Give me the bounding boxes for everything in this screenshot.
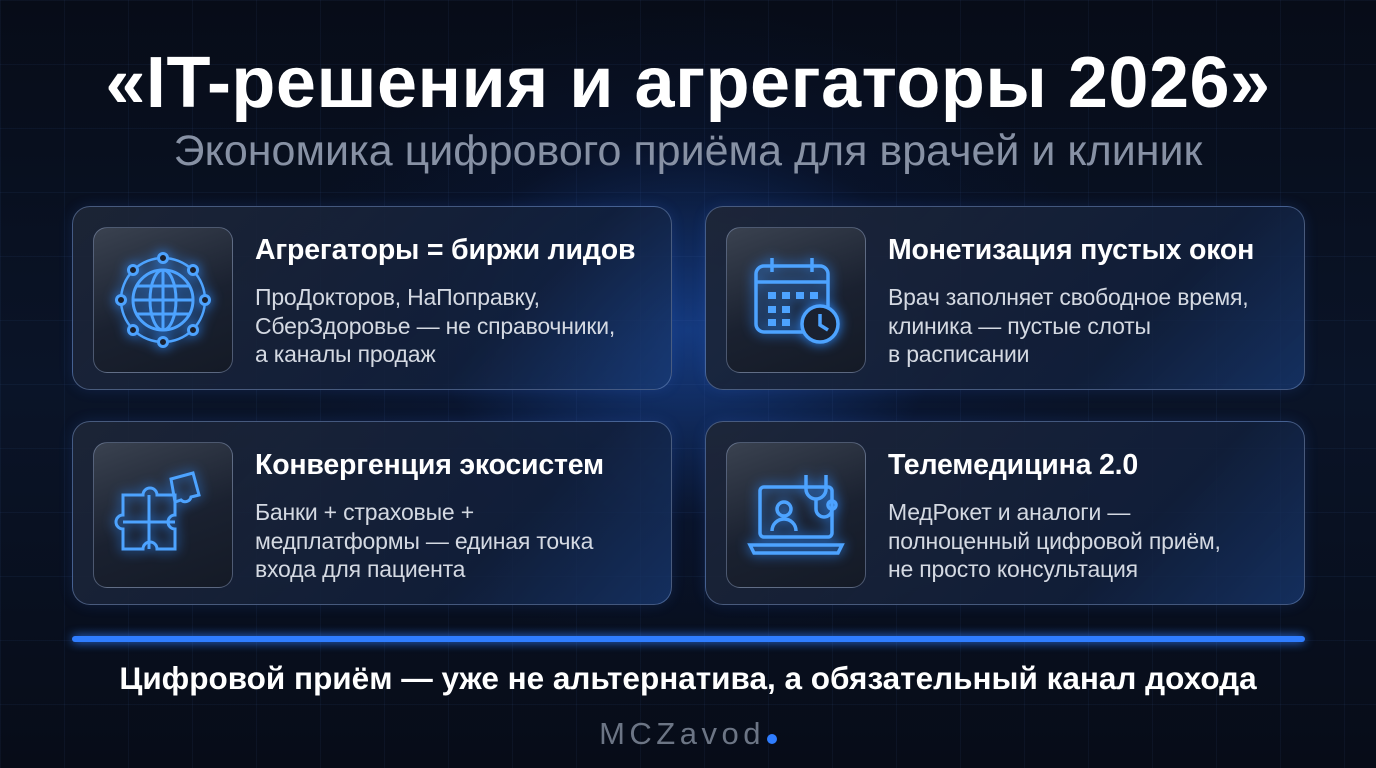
heading: Монетизация пустых окон <box>888 234 1254 266</box>
panel: aggregators <box>72 206 672 390</box>
text: Врач заполняет свободное время, <box>888 284 1248 310</box>
text <box>255 499 594 582</box>
subtitle: Экономика цифрового приёма для врачей и клиник <box>174 127 1202 175</box>
icon: calendar clock <box>726 227 866 373</box>
text: в расписании <box>888 341 1029 367</box>
heading: Конвергенция экосистем <box>255 449 604 481</box>
text: клиника — пустые слоты <box>888 312 1151 338</box>
title: «IT-решения и агрегаторы 2026» <box>105 43 1271 123</box>
panel: telemedicine <box>705 421 1305 605</box>
text: входа для пациента <box>255 556 465 582</box>
text <box>888 499 1221 582</box>
heading: Агрегаторы = биржи лидов <box>255 234 635 266</box>
panel: empty slots <box>705 206 1305 390</box>
icon: laptop doctor <box>726 442 866 588</box>
text: ПроДокторов, НаПоправку, <box>255 284 540 310</box>
icon: puzzle <box>93 442 233 588</box>
divider line <box>72 636 1305 642</box>
text: Банки + страховые + <box>255 499 474 525</box>
heading: Телемедицина 2.0 <box>888 449 1138 481</box>
text: МедРокет и аналоги — <box>888 499 1130 525</box>
panel: ecosystems <box>72 421 672 605</box>
text: СберЗдоровье — не справочники, <box>255 312 615 338</box>
text: не просто консультация <box>888 556 1138 582</box>
text: полноценный цифровой приём, <box>888 528 1221 554</box>
text <box>888 284 1248 367</box>
logo: MCZavod <box>599 716 765 751</box>
text: а каналы продаж <box>255 341 436 367</box>
text: медплатформы — единая точка <box>255 528 593 554</box>
conclusion text: Цифровой приём — уже не альтернатива, а обязательный канал дохода <box>119 660 1257 696</box>
icon: globe network <box>93 227 233 373</box>
text <box>255 284 615 367</box>
